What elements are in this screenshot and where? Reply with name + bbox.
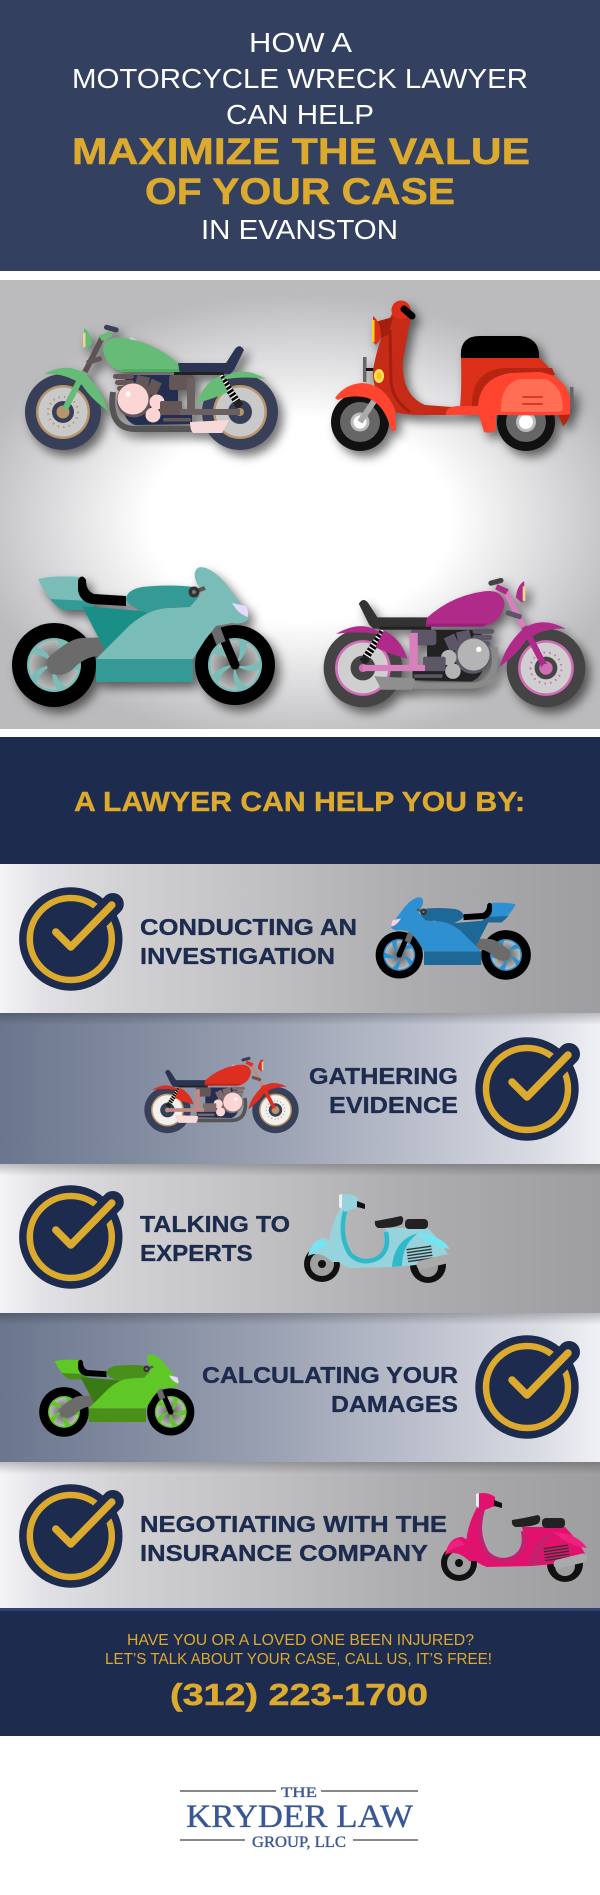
- icon: pink scooter: [441, 1493, 587, 1582]
- title: how a: HOW A: [249, 27, 352, 58]
- panel: call to action footer: [0, 1608, 600, 1736]
- icon: magenta cruiser motorcycle: [324, 577, 585, 707]
- header panel: [0, 0, 600, 271]
- title: maximize the value: MAXIMIZE THE VALUE: [72, 130, 530, 172]
- title: motorcycle wreck lawyer: MOTORCYCLE WRECK LAWYER: [72, 63, 528, 94]
- phone number: (312) 223-1700: [170, 1677, 428, 1712]
- row: conducting an investigation: [0, 864, 600, 1013]
- text: gathering evidence: EVIDENCE: [329, 1092, 458, 1118]
- icon: check mark: [19, 887, 122, 991]
- text: negotiating with the insurance company: INSURANCE COMPANY: [140, 1540, 428, 1566]
- text: talking to experts: EXPERTS: [140, 1240, 253, 1266]
- icon: teal sport motorcycle: [12, 567, 275, 707]
- heading text: A LAWYER CAN HELP YOU BY:: [74, 786, 525, 817]
- icon: green sport motorcycle: [39, 1354, 194, 1437]
- text: calculating your damages: DAMAGES: [331, 1391, 458, 1417]
- text: calculating your damages: CALCULATING YOUR: [202, 1362, 458, 1388]
- icon: check mark: [475, 1037, 579, 1141]
- text: let's talk: LET’S TALK ABOUT YOUR CASE, CALL US, IT’S FREE!: [105, 1651, 492, 1668]
- text: have you been injured: HAVE YOU OR A LOVED ONE BEEN INJURED?: [127, 1632, 474, 1649]
- text: negotiating with the insurance company: NEGOTIATING WITH THE: [140, 1511, 447, 1537]
- icon: blue sport motorcycle: [376, 897, 531, 980]
- icon: red cruiser motorcycle: [144, 1056, 299, 1133]
- panel: a lawyer can help heading: [0, 737, 600, 864]
- text: conducting an investigation: CONDUCTING AN: [140, 914, 357, 940]
- icon: cyan scooter: [304, 1194, 450, 1283]
- icon: green cruiser motorcycle: [25, 324, 278, 450]
- title: can help: CAN HELP: [226, 99, 374, 130]
- logo: the kryder law group: THE: [281, 1785, 317, 1801]
- row: gathering evidence: [0, 1013, 600, 1164]
- title: in evanston: IN EVANSTON: [201, 214, 398, 245]
- text: gathering evidence: GATHERING: [309, 1063, 458, 1089]
- row: talking to experts: [0, 1164, 600, 1313]
- text: conducting an investigation: INVESTIGATION: [140, 943, 335, 969]
- logo: the kryder law group: GROUP, LLC: [252, 1834, 346, 1851]
- icon: check mark: [475, 1335, 579, 1439]
- panel: four motorcycles: [0, 280, 600, 729]
- row: calculating your damages: [0, 1313, 600, 1462]
- icon: red scooter: [331, 300, 574, 451]
- row: negotiating with the insurance company: [0, 1462, 600, 1608]
- icon: check mark: [19, 1484, 122, 1588]
- logo: the kryder law group: [180, 1785, 418, 1851]
- title: of your case: OF YOUR CASE: [145, 170, 455, 212]
- icon: check mark: [19, 1185, 122, 1289]
- text: talking to experts: TALKING TO: [140, 1211, 290, 1237]
- logo: the kryder law group: KRYDER LAW: [186, 1799, 414, 1835]
